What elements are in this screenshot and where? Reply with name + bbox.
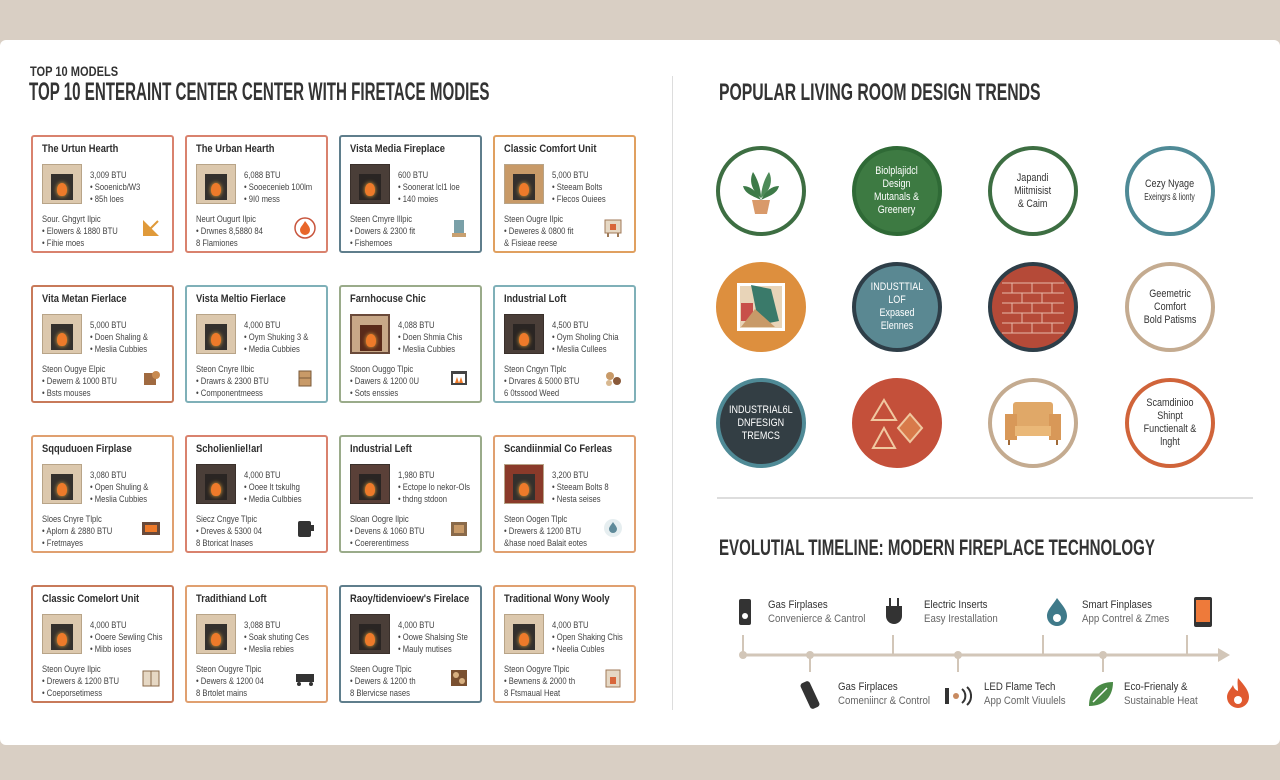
card 6: • Componentmeess [196, 388, 263, 398]
card 15 [339, 585, 482, 703]
card 8: 6 0tssood Weed [504, 388, 559, 398]
card 13: • Coeporsetimess [42, 688, 102, 698]
circle: geometric shapes [852, 378, 942, 468]
circle: cozy hygge: Exeingrs & Iionty [1145, 192, 1195, 203]
divider vertical [672, 76, 673, 710]
card 15: 8 Blervicse nases [350, 688, 410, 698]
card 11: • thdng stdoon [398, 494, 447, 504]
card 1: Sour. Ghgyrt Ilpic [42, 214, 101, 224]
card 16: • Open Shaking Chis [552, 632, 623, 642]
timeline axis arrow [739, 635, 1230, 672]
circle: industrial loft: INDUSTTIAL LOF [871, 281, 923, 306]
card 11: • Coererentimess [350, 538, 409, 548]
card 2: The Urban Hearth [196, 143, 274, 155]
card 12: Scandiinmial Co Ferleas [504, 443, 612, 455]
card 9 [31, 435, 174, 553]
card 12: Steon Oogen Tlplc [504, 514, 567, 524]
card 4: 5,000 BTU [552, 170, 589, 180]
heading: design trends: POPULAR LIVING ROOM DESIGN TRENDS [719, 79, 1041, 106]
card 5 [31, 285, 174, 403]
text: LED flame tech: LED Flame Tech [984, 681, 1055, 693]
card 13: 4,000 BTU [90, 620, 127, 630]
card 7: • Dawers & 1200 0U [350, 376, 419, 386]
circle: biophilic design: Greenery [878, 204, 916, 216]
card 4 [493, 135, 636, 253]
circle: brick [988, 262, 1078, 352]
circle: industrial loft [852, 262, 942, 352]
panel: trend circles [716, 146, 1215, 468]
card 9: • Meslia Cubbies [90, 494, 147, 504]
card 16: 4,000 BTU [552, 620, 589, 630]
card 1: The Urtun Hearth [42, 143, 118, 155]
text: gas fireplaces: Convenierce & Cantrol [768, 613, 865, 625]
card 7: 4,088 BTU [398, 320, 435, 330]
card 5: • Meslia Cubbies [90, 344, 147, 354]
card 16: Traditional Wony Wooly [504, 593, 610, 605]
card 15: • Dewers & 1200 th [350, 676, 416, 686]
card 6: • Oym Shuking 3 & [244, 332, 308, 342]
card 11: Industrial Left [350, 443, 412, 455]
card 13: • Ooere Sewling Chis [90, 632, 162, 642]
circle: scandinavian: Scamdinioo Shinpt [1146, 397, 1194, 422]
card 12: &hase noed Balait eotes [504, 538, 587, 548]
card 3: • Fishemoes [350, 238, 392, 248]
card 15: 4,000 BTU [398, 620, 435, 630]
text: LED flame tech [984, 681, 1066, 707]
card 5: • Dewern & 1000 BTU [42, 376, 117, 386]
card 2: 6,088 BTU [244, 170, 281, 180]
card 4: • Steeam Bolts [552, 182, 602, 192]
card 9: • Open Shuling & [90, 482, 148, 492]
card 9: 3,080 BTU [90, 470, 127, 480]
card 4: & Fisieae reese [504, 238, 557, 248]
card 10 [185, 435, 328, 553]
card 13: • Mibb ioses [90, 644, 131, 654]
card 3: Vista Media Fireplace [350, 143, 445, 155]
card 7: • Meslia Cubbies [398, 344, 455, 354]
card 12: • Drewers & 1200 BTU [504, 526, 581, 536]
card 5: Steon Ougye Elpic [42, 364, 105, 374]
card 16: • Bewnens & 2000 th [504, 676, 575, 686]
circle: armchair [988, 378, 1078, 468]
card 14: Steon Ougyre Tlpic [196, 664, 261, 674]
text: smart fireplaces: App Contrel & Zmes [1082, 613, 1169, 625]
text: eco-friendly: Eco-Frienaly & [1124, 681, 1187, 693]
text: electric inserts [924, 599, 998, 625]
card 6: 4,000 BTU [244, 320, 281, 330]
card 10: Siecz Cngye Tlpic [196, 514, 257, 524]
circle: plant [716, 146, 806, 236]
circle: industrial design trends: TREMCS [742, 430, 780, 442]
card 5: • Doen Shaling & [90, 332, 148, 342]
card 10: • Ooee lt tskulhg [244, 482, 300, 492]
card 3: • Soonerat lcl1 loe [398, 182, 460, 192]
card 3 [339, 135, 482, 253]
circle: biophilic design: Mutanals & [874, 191, 920, 203]
circle: biophilic design [852, 146, 942, 236]
card 11: • Devens & 1060 BTU [350, 526, 425, 536]
card 15: Steen Ougre Tlpic [350, 664, 412, 674]
text: LED flame tech: App Comlt Viuulels [984, 695, 1066, 707]
card 5: • Bsts mouses [42, 388, 91, 398]
circle: japandi [988, 146, 1078, 236]
card 7 [339, 285, 482, 403]
card 5: Vita Metan Fierlace [42, 293, 127, 305]
circle: scandinavian: Functienalt & lnght [1144, 423, 1196, 448]
card 14: • Soak shuting Ces [244, 632, 309, 642]
card 11: 1,980 BTU [398, 470, 435, 480]
icon: LED sound [945, 686, 972, 706]
card 12: 3,200 BTU [552, 470, 589, 480]
card 12: • Nesta seises [552, 494, 601, 504]
card 4: Classic Comfort Unit [504, 143, 596, 155]
card 14 [185, 585, 328, 703]
circle: industrial design trends [716, 378, 806, 468]
title: top 10 entertainment center: TOP 10 ENTERAINT CENTER CENTER WITH FIRETACE MODIES [29, 78, 490, 106]
text: smart fireplaces: Smart Finplases [1082, 599, 1152, 611]
circle: cozy hygge: Cezy Nyage [1145, 178, 1195, 190]
card 7: Stoon Ouggo Tlpic [350, 364, 413, 374]
card 15: • Oowe Shalsing Ste [398, 632, 468, 642]
card 8: Industrial Loft [504, 293, 566, 305]
text: eco-friendly: Sustainable Heat [1124, 695, 1198, 707]
card 13: Steon Ouyre Ilpic [42, 664, 101, 674]
card 9: Sqquduoen Firplase [42, 443, 132, 455]
card 2 [185, 135, 328, 253]
text: eco-friendly [1124, 681, 1198, 707]
icon: plug [886, 598, 902, 624]
heading: timeline: EVOLUTIAL TIMELINE: MODERN FIREPLACE TECHNOLOGY [719, 535, 1155, 560]
card 1: • Elowers & 1880 BTU [42, 226, 118, 236]
icon: remote [739, 599, 751, 625]
card 16: 8 Ftsmaual Heat [504, 688, 560, 698]
card 7: • Sots enssies [350, 388, 398, 398]
circle: cozy hygge [1125, 146, 1215, 236]
circle: japandi: & Caim [1018, 198, 1048, 210]
circle: industrial design trends: DNFESIGN [738, 416, 784, 428]
card 10: • Media Culbbies [244, 494, 302, 504]
card 8: • Oym Sholing Chia [552, 332, 618, 342]
card 6 [185, 285, 328, 403]
circle: scandinavian [1125, 378, 1215, 468]
card 6: • Drawrs & 2300 BTU [196, 376, 269, 386]
card 14: 3,088 BTU [244, 620, 281, 630]
icon: flame blue [1047, 598, 1067, 626]
card 8 [493, 285, 636, 403]
text: electric inserts: Electric Inserts [924, 599, 987, 611]
card 2: • 9I0 mess [244, 194, 280, 204]
text: gas fireplaces: Gas Firplases [768, 599, 828, 611]
card 1: • Sooenicb/W3 [90, 182, 140, 192]
card 8: • Drvares & 5000 BTU [504, 376, 579, 386]
card 10: 8 Btoricat Inases [196, 538, 253, 548]
circle: industrial loft: Expased [879, 307, 915, 319]
card 2: • Drwnes 8,5880 84 [196, 226, 263, 236]
icon: remote 2 [800, 681, 820, 709]
card 3: • 140 moies [398, 194, 438, 204]
circle: industrial loft: Elennes [881, 320, 913, 332]
card 9: • Fretmayes [42, 538, 83, 548]
card 12 [493, 435, 636, 553]
card 11: • Ectope lo nekor-Ols [398, 482, 470, 492]
card 6: Steon Cnyre Ilbic [196, 364, 254, 374]
card 3: Steen Cmyre Illpic [350, 214, 412, 224]
circle: biophilic design: Biolplajidcl [876, 165, 918, 177]
circle: geometric comfort: Comfort [1154, 300, 1186, 312]
card 1: • Fihie moes [42, 238, 84, 248]
circle: geometric comfort: Bold Patisms [1144, 314, 1196, 326]
card 9: Sloes Cnyre Tlplc [42, 514, 102, 524]
card 14: • Meslia rebies [244, 644, 294, 654]
card 14: 8 Brtolet mains [196, 688, 247, 698]
circle: industrial design trends: INDUSTRIAL6L [729, 404, 793, 416]
card 4: • Flecos Ouiees [552, 194, 606, 204]
icon: red flame [1227, 678, 1249, 708]
card 8: • Meslia Cullees [552, 344, 607, 354]
divider horizontal [717, 497, 1253, 499]
card 16: • Neelia Cubles [552, 644, 604, 654]
chart: timeline [739, 597, 1249, 709]
card 13 [31, 585, 174, 703]
card 6: Vista Meltio Fierlace [196, 293, 286, 305]
card 7: • Doen Shmia Chis [398, 332, 462, 342]
card 7: Farnhocuse Chic [350, 293, 426, 305]
card 14: • Dewers & 1200 04 [196, 676, 264, 686]
card 4: • Deweres & 0800 fit [504, 226, 573, 236]
card 6: • Media Cubbies [244, 344, 300, 354]
card 1 [31, 135, 174, 253]
circle: biophilic design: Design [883, 178, 911, 190]
card 13: Classic Comelort Unit [42, 593, 139, 605]
card 8: Steon Cngyn Tlplc [504, 364, 566, 374]
card 2: 8 Flamiones [196, 238, 238, 248]
card 2: • Sooecenieb 100lm [244, 182, 312, 192]
circle: textile art [716, 262, 806, 352]
card 5: 5,000 BTU [90, 320, 127, 330]
card 9: • Aplorn & 2880 BTU [42, 526, 112, 536]
circle: geometric comfort: Geemetric [1149, 288, 1191, 300]
card 16 [493, 585, 636, 703]
card 2: Neurt Ougurt Ilpic [196, 214, 256, 224]
card 3: 600 BTU [398, 170, 428, 180]
card 13: • Drewers & 1200 BTU [42, 676, 119, 686]
icon: leaf [1089, 682, 1113, 706]
card 14: Tradithiand Loft [196, 593, 267, 605]
card 11 [339, 435, 482, 553]
text: gas fireplaces 2: Gas Firplaces [838, 681, 898, 693]
card 8: 4,500 BTU [552, 320, 589, 330]
card 15: • Mauly mutises [398, 644, 452, 654]
card 12: • Steeam Bolts 8 [552, 482, 609, 492]
text: gas fireplaces [768, 599, 865, 625]
card 3: • Dowers & 2300 fit [350, 226, 415, 236]
panel: model cards grid [31, 135, 636, 703]
card 4: Steen Ougre Ilpic [504, 214, 563, 224]
text: gas fireplaces 2: Comeniincr & Control [838, 695, 930, 707]
icon: tablet [1194, 597, 1212, 627]
text: gas fireplaces 2 [838, 681, 930, 707]
card 1: • 85h loes [90, 194, 124, 204]
card 16: Steon Oogyre Tlpic [504, 664, 569, 674]
circle: geometric comfort [1125, 262, 1215, 352]
subtitle: top 10 models: TOP 10 MODELS [30, 63, 118, 79]
card 10: 4,000 BTU [244, 470, 281, 480]
text: smart fireplaces [1082, 599, 1169, 625]
card 11: Sloan Oogre Ilpic [350, 514, 409, 524]
card 10: Scholienliel!arl [196, 443, 263, 455]
circle: japandi: Japandi [1017, 172, 1049, 184]
card 15: Raoy/tidenvioew's Firelace [350, 593, 469, 605]
text: electric inserts: Easy Irestallation [924, 613, 998, 625]
card 1: 3,009 BTU [90, 170, 127, 180]
card 10: • Dreves & 5300 04 [196, 526, 262, 536]
circle: japandi: Miitmisist [1014, 184, 1052, 196]
